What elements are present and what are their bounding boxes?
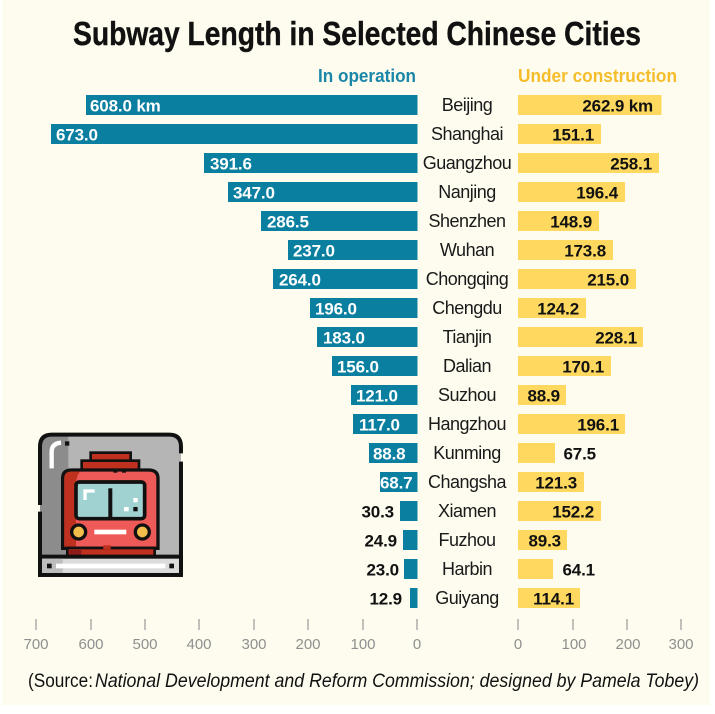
city labels: Chongqing: [426, 269, 508, 289]
chart: in operation bars: 30.3: [362, 502, 394, 522]
chart: in operation bars: 183.0: [323, 328, 365, 348]
chart: in operation bars: 237.0: [293, 242, 335, 260]
chart: under construction bars: 262.9 km: [582, 96, 653, 116]
chart: under construction bars: [518, 95, 662, 608]
axis: under construction: 0: [514, 636, 522, 653]
chart: under construction bars: 152.2: [552, 502, 594, 522]
chart: in operation bars: 608.0 km: [90, 96, 161, 116]
chart: under construction bars: 121.3: [535, 474, 577, 492]
chart: in operation bars: [51, 95, 418, 608]
chart: under construction bars: 67.5: [564, 444, 596, 464]
chart: in operation bars: 23.0: [366, 560, 399, 580]
chart: under construction bars: 64.1: [562, 560, 595, 580]
chart: in operation bars: 673.0: [56, 126, 98, 144]
city labels: Nanjing: [438, 182, 496, 202]
chart: under construction bars: 151.1: [552, 126, 594, 144]
chart: in operation bars: 117.0: [359, 416, 400, 434]
chart: in operation bars: 347.0: [233, 184, 275, 202]
chart: in operation bars: 264.0: [279, 270, 321, 290]
chart: under construction bars: 88.9: [528, 386, 560, 406]
chart: under construction bars: 258.1: [610, 154, 652, 174]
axis: in operation: 200: [295, 636, 321, 653]
city labels: Guiyang: [435, 588, 499, 608]
city labels: Chengdu: [432, 298, 502, 318]
axis: in operation: 700: [23, 636, 49, 653]
axis: in operation: 500: [132, 636, 158, 653]
axis: in operation: 300: [241, 636, 267, 653]
chart: under construction bars: 170.1: [562, 358, 604, 376]
source note: (Source:: [28, 671, 93, 692]
city labels: Shanghai: [431, 124, 503, 144]
chart: in operation bars: 68.7: [380, 474, 412, 492]
axis: under construction: 300: [668, 636, 694, 653]
axis: in operation: [23, 619, 421, 653]
chart: under construction bars: 89.3: [528, 532, 561, 550]
axis: in operation: 600: [78, 636, 104, 653]
chart: in operation bars: 391.6: [210, 154, 252, 174]
chart: in operation bars: 88.8: [373, 444, 406, 464]
chart: in operation bars: 24.9: [364, 532, 397, 550]
city labels: Wuhan: [440, 240, 494, 260]
city labels: Beijing: [442, 95, 492, 115]
chart: under construction bars: 173.8: [564, 242, 606, 260]
city labels: Hangzhou: [428, 414, 506, 434]
heading: under construction: Under construction: [518, 66, 677, 86]
chart: in operation bars: 156.0: [337, 358, 379, 376]
chart: under construction bars: 196.4: [576, 184, 619, 202]
city labels: Changsha: [428, 472, 508, 492]
axis: in operation: 100: [350, 636, 376, 653]
city labels: Suzhou: [438, 385, 496, 405]
city labels: Dalian: [443, 356, 491, 376]
heading: in operation: In operation: [318, 66, 416, 86]
chart: under construction bars: 124.2: [537, 300, 579, 318]
icon: subway train in tunnel: [40, 435, 181, 575]
chart: under construction bars: 215.0: [587, 270, 629, 290]
city labels: [423, 95, 511, 608]
axis: under construction: 100: [561, 636, 587, 653]
chart: in operation bars: 286.5: [267, 212, 309, 232]
city labels: Xiamen: [438, 501, 496, 521]
city labels: Harbin: [442, 559, 492, 579]
chart: in operation bars: 121.0: [356, 386, 398, 406]
chart: under construction bars: 228.1: [595, 328, 637, 348]
chart: in operation bars: 12.9: [370, 590, 402, 608]
chart: under construction bars: 148.9: [550, 212, 592, 232]
city labels: Guangzhou: [423, 153, 511, 173]
axis: in operation: 400: [186, 636, 212, 653]
city labels: Fuzhou: [438, 530, 496, 550]
city labels: Kunming: [433, 443, 501, 463]
chart: under construction bars: 196.1: [577, 416, 619, 434]
city labels: Shenzhen: [428, 211, 506, 231]
axis: under construction: [514, 619, 694, 653]
chart: in operation bars: 196.0: [315, 300, 357, 318]
city labels: Tianjin: [443, 327, 491, 347]
chart: under construction bars: 114.1: [533, 590, 574, 608]
axis: under construction: 200: [615, 636, 641, 653]
axis: in operation: 0: [413, 636, 421, 653]
